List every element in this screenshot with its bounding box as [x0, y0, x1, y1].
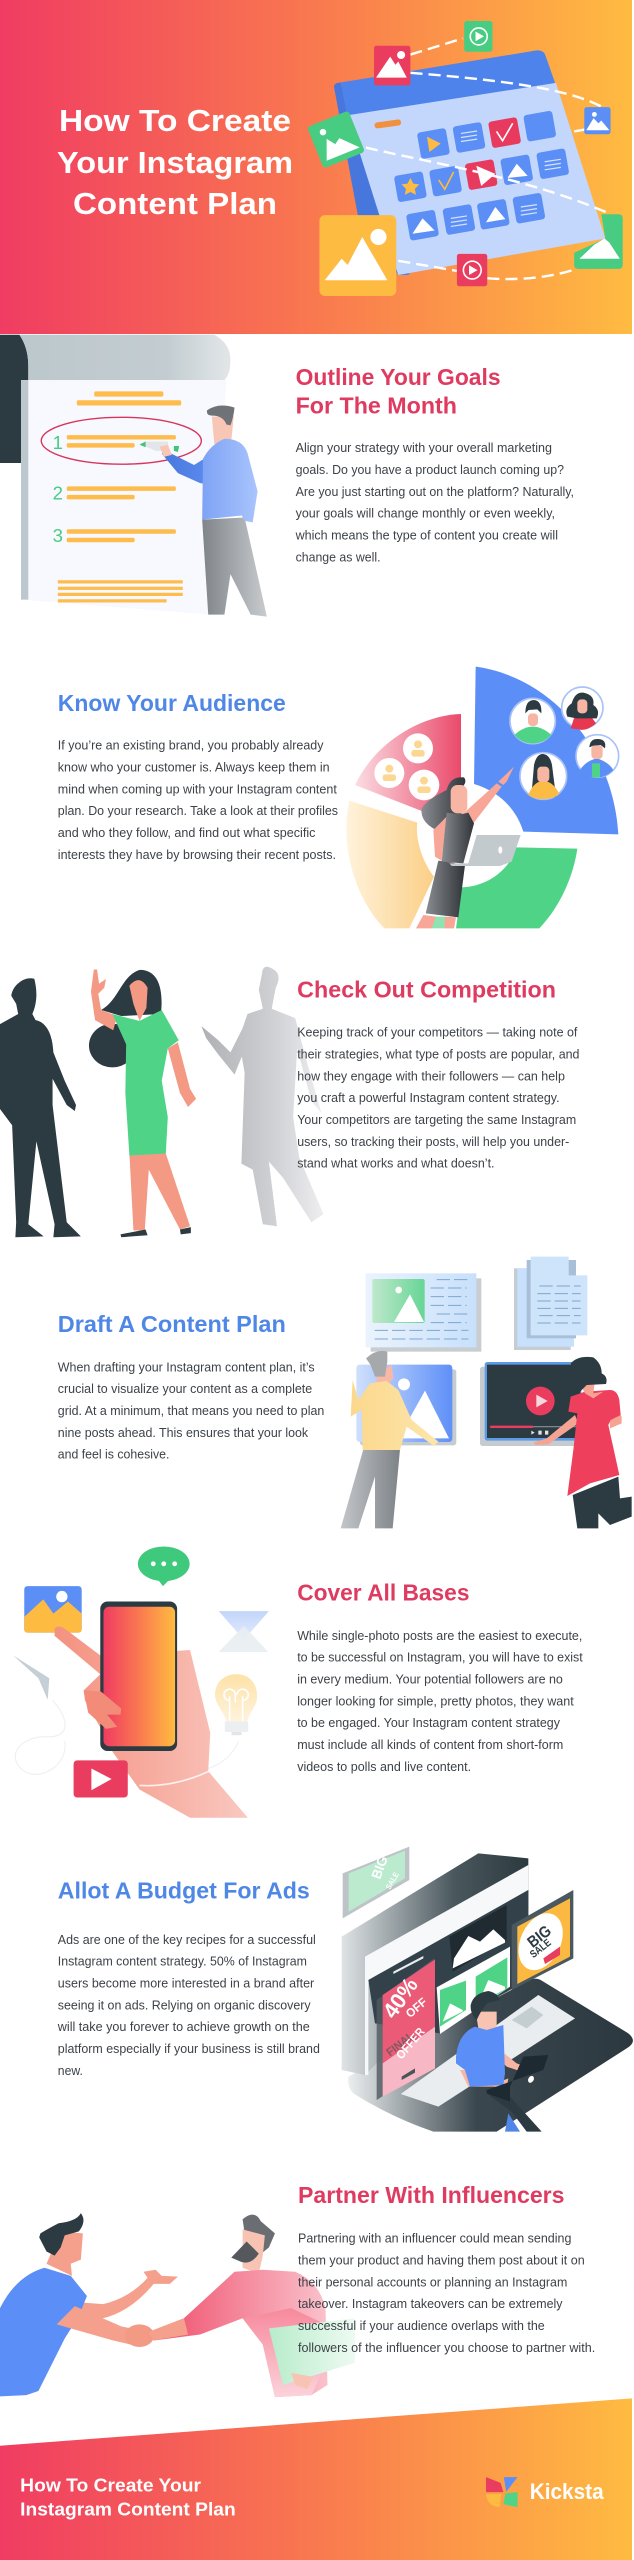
ad card: 40% off: OFFER — [393, 2025, 428, 2062]
ad card: big sale green: SALE — [384, 1870, 401, 1891]
heading: Draft A Content Plan — [58, 1311, 286, 1337]
laptop base — [348, 1979, 633, 2132]
logo: Kicksta — [486, 2477, 604, 2507]
body text: Your competitors are targeting the same Instagram — [297, 1113, 576, 1127]
ad card: big sale yellow: SALE — [528, 1937, 554, 1961]
heading — [296, 364, 501, 419]
icon: video red — [457, 254, 487, 286]
body text: If you’re an existing brand, you probably already — [58, 739, 324, 753]
body text: Partnering with an influencer could mean sending — [298, 2232, 571, 2246]
calendar sheet — [348, 83, 605, 275]
icon: light bulb — [215, 1674, 257, 1735]
illustration: audience pie and woman — [346, 667, 619, 928]
body text: change as well. — [296, 550, 380, 564]
footer title: How To Create Your — [20, 2474, 201, 2495]
illustration: three people — [0, 967, 323, 1237]
list numbers: 3 — [53, 525, 63, 546]
calendar cells — [394, 110, 569, 241]
heading: Know Your Audience — [58, 690, 286, 716]
body text: to be engaged. Your Instagram content strategy — [297, 1716, 561, 1730]
icon: image blue — [584, 107, 611, 134]
woman — [416, 767, 521, 928]
title: Your Instagram — [57, 145, 293, 180]
body text: their strategies, what type of posts are popular, and — [297, 1048, 580, 1062]
body text — [297, 1629, 583, 1774]
body text: nine posts ahead. This ensures that your look — [58, 1426, 309, 1440]
dashed connectors — [366, 38, 607, 279]
heading: Partner With Influencers — [298, 2182, 564, 2208]
body text: must include all kinds of content from short-form — [297, 1738, 563, 1752]
woman in green — [89, 970, 196, 1237]
heading: Cover All Bases — [297, 1580, 470, 1606]
image board — [356, 1365, 456, 1445]
title — [57, 103, 293, 221]
body text: takeover. Instagram takeovers can be extremely — [298, 2297, 563, 2311]
green tiles — [440, 1981, 466, 2027]
man — [160, 406, 267, 617]
body text: successful if your audience overlaps with the — [298, 2319, 545, 2333]
body text: in every medium. Your potential followers are no — [297, 1673, 563, 1687]
body text: your goals will change monthly or even weekly, — [296, 507, 555, 521]
heading: For The Month — [296, 393, 457, 419]
body text: plan. Do your research. Take a look at their profiles — [58, 804, 338, 818]
ad card: 40% off: FINAL — [384, 2030, 417, 2059]
article card — [366, 1273, 481, 1352]
panel: know your audience — [58, 667, 619, 928]
body text: and feel is cohesive. — [58, 1448, 169, 1462]
panel: draft a content plan — [58, 1257, 632, 1528]
list numbers: 2 — [53, 482, 63, 503]
body text: While single-photo posts are the easiest to execute, — [297, 1629, 582, 1643]
ad card: big sale yellow — [510, 1890, 573, 1990]
hand — [55, 1626, 248, 1818]
ad card: 40% off — [377, 1958, 435, 2100]
body text: followers of the influencer you choose to partner with. — [298, 2341, 595, 2355]
body text: and who they follow, and find out what specific — [58, 826, 315, 840]
illustration: content boards and people — [341, 1257, 632, 1528]
icon: video green — [464, 21, 492, 52]
footer title: Instagram Content Plan — [20, 2499, 236, 2520]
body text: Are you just starting out on the platform? Naturally, — [296, 485, 574, 499]
body text: know who your customer is. Always keep them in — [58, 760, 330, 774]
body text — [298, 2232, 595, 2355]
body text: will take you forever to achieve growth on the — [57, 2020, 310, 2034]
illustration: handshake — [0, 2213, 355, 2397]
body text: longer looking for simple, pretty photos, they want — [297, 1694, 574, 1708]
body text: to be successful on Instagram, you will have to exist — [297, 1651, 583, 1665]
woman in red — [533, 1357, 632, 1528]
document stack — [514, 1257, 587, 1350]
heading: Outline Your Goals — [296, 364, 501, 390]
dark man — [0, 978, 81, 1237]
body text: interests they have by browsing their recent posts. — [58, 848, 336, 862]
body text: crucial to visualize your content as a complete — [58, 1382, 312, 1396]
decorative line and plane — [13, 1655, 49, 1700]
grey silhouette — [201, 967, 323, 1226]
illustration: hand holding phone — [13, 1546, 269, 1818]
fingers — [84, 1690, 121, 1729]
ad card: 40% off: OFF — [403, 1995, 430, 2021]
avatars — [510, 687, 619, 799]
body text — [295, 441, 574, 564]
body text: platform especially if your business is still brand — [58, 2042, 320, 2056]
body text — [297, 1026, 580, 1171]
left man — [0, 2213, 178, 2396]
ad card: big sale green — [343, 1847, 409, 1918]
icon: phone — [100, 1601, 177, 1751]
illustration: isometric laptop — [342, 1847, 633, 2132]
body text: new. — [58, 2064, 83, 2078]
calendar illustration — [307, 21, 623, 296]
body text: users, so tracking their posts, will help you under- — [297, 1135, 569, 1149]
icon: image card — [24, 1586, 82, 1633]
body text: mind when coming up with your Instagram content — [58, 782, 337, 796]
body text: Instagram content strategy. 50% of Instagram — [58, 1955, 307, 1969]
body text: grid. At a minimum, that means you need to plan — [58, 1404, 324, 1418]
ad card: big sale yellow: BIG — [525, 1923, 555, 1951]
panel: allot a budget for ads — [57, 1847, 633, 2132]
calendar back — [340, 50, 560, 275]
right man — [148, 2215, 355, 2397]
icon: image green right — [574, 214, 623, 269]
footer title — [20, 2474, 236, 2520]
body text: you craft a powerful Instagram content strategy. — [297, 1091, 560, 1105]
logo: Kicksta: Kicksta — [530, 2479, 604, 2504]
heading: Check Out Competition — [297, 976, 556, 1002]
body text: their personal accounts or planning an Instagram — [298, 2275, 567, 2289]
heading: Allot A Budget For Ads — [58, 1877, 310, 1903]
body text: When drafting your Instagram content plan, it’s — [58, 1360, 315, 1374]
body text — [58, 739, 338, 862]
body text: stand what works and what doesn’t. — [297, 1157, 494, 1171]
title: Content Plan — [73, 186, 277, 221]
man from behind — [341, 1351, 438, 1528]
body text: seeing it on ads. Relying on organic discovery — [58, 1998, 311, 2012]
list numbers: 1 — [53, 432, 63, 453]
small user icons — [374, 733, 439, 800]
body text: Align your strategy with your overall marketing — [296, 441, 552, 455]
laptop screen — [342, 1853, 528, 2075]
body text: them your product and having them post about it on — [298, 2254, 585, 2268]
icon: image yellow — [319, 215, 396, 296]
body text: how they engage with their followers — can help — [297, 1069, 565, 1083]
icon: image green — [307, 111, 365, 168]
body text: users become more interested in a brand after — [58, 1976, 314, 1990]
panel: cover all bases — [13, 1546, 583, 1818]
panel: outline your goals — [0, 335, 574, 617]
body text — [57, 1933, 320, 2078]
list numbers — [53, 432, 63, 546]
panel: partner with influencers — [0, 2182, 595, 2397]
icon: chat bubble — [138, 1546, 190, 1586]
body text: goals. Do you have a product launch coming up? — [296, 463, 564, 477]
body text: videos to polls and live content. — [297, 1760, 471, 1774]
person on laptop — [456, 1991, 548, 2132]
body text: which means the type of content you create will — [295, 528, 558, 542]
body text — [58, 1360, 324, 1462]
title: How To Create — [59, 103, 291, 138]
hourglass — [219, 1611, 269, 1652]
panel: check out competition — [0, 967, 580, 1237]
header banner — [0, 0, 632, 334]
ad card: big sale green: BIG — [369, 1854, 392, 1881]
ad card: 40% off: 40% — [378, 1973, 423, 2023]
icon: video — [74, 1760, 128, 1798]
icon: image red — [374, 46, 410, 85]
illustration: checklist and man — [0, 335, 267, 617]
mountain tile — [449, 1905, 507, 1972]
video board — [480, 1362, 581, 1446]
body text: Keeping track of your competitors — taking note of — [297, 1026, 578, 1040]
body text: Ads are one of the key recipes for a successful — [58, 1933, 316, 1947]
footer banner — [0, 2398, 632, 2560]
keyboard — [401, 1995, 575, 2107]
